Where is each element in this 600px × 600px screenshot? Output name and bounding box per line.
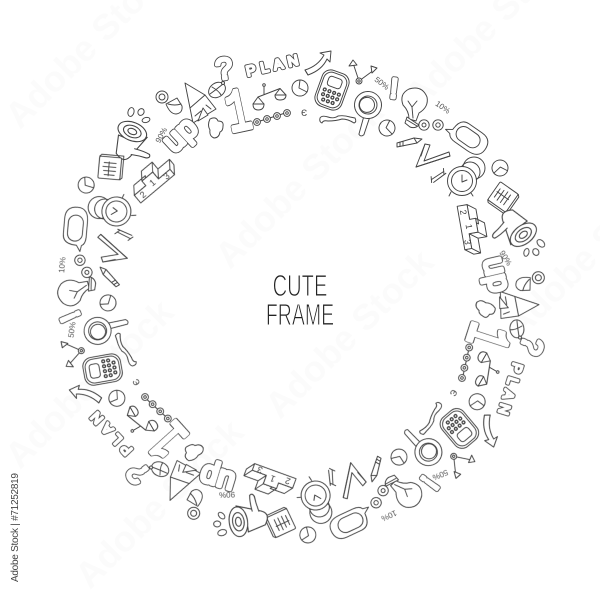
word: up: up — [155, 110, 204, 159]
icon: branching arrows — [54, 334, 89, 370]
icon: speech bubble — [443, 115, 492, 159]
title: CUTE FRAME: FRAME — [266, 299, 334, 332]
icon: pencil — [99, 263, 119, 289]
icon: alarm clock — [448, 157, 485, 196]
word: PLAN: PLAN — [245, 53, 300, 80]
faint stock watermarks: Adobe Stock — [0, 290, 182, 476]
icon: podium with numbers — [241, 461, 296, 501]
icon: podium with numbers: 3 — [462, 239, 473, 245]
icon: scales — [253, 84, 286, 110]
icon: small arrows — [431, 168, 447, 183]
icon: small arrows — [114, 225, 133, 244]
icon: branching arrows — [349, 60, 377, 84]
word: up: up — [155, 110, 204, 159]
label: 10%: 10% — [380, 508, 398, 523]
icon: calculator — [312, 67, 352, 113]
icon: pie chart — [297, 524, 319, 546]
icon: curved arrow — [473, 413, 507, 447]
icon: magnifier — [395, 423, 447, 471]
icon: speech bubble — [62, 206, 89, 252]
icon: pie chart — [466, 391, 488, 413]
icon: person with trophy — [514, 264, 547, 298]
icon: speech bubble — [327, 503, 376, 542]
faint stock watermarks: Adobe Stock — [67, 410, 252, 596]
title: CUTE FRAME: CUTE — [273, 268, 327, 303]
exclamation mark: ! — [388, 73, 399, 104]
label: 90%: 90% — [497, 249, 514, 267]
icon: rocket — [185, 83, 216, 123]
word: PLAN: PLAN — [88, 408, 136, 458]
label: 10%: 10% — [434, 99, 452, 116]
numeral 1: 1 — [138, 406, 204, 469]
label: 50%: 50% — [431, 468, 449, 482]
icon: podium with numbers: 2 — [138, 189, 148, 200]
exclamation mark: ! — [55, 307, 86, 327]
icon: alarm clock — [84, 184, 137, 236]
doodle ring, arc 1 of 3 — [115, 51, 520, 256]
exclamation mark: ! — [388, 73, 399, 104]
icon: person with trophy — [178, 487, 211, 521]
icon: check mark — [334, 463, 371, 504]
icon: podium with numbers: 2 — [284, 475, 292, 487]
exclamation mark: ! — [55, 307, 86, 327]
word: up: up — [196, 458, 239, 501]
icon: cloud — [472, 297, 497, 320]
word: PLAN: PLAN — [245, 53, 300, 80]
icon: squiggle — [320, 116, 356, 123]
icon: light bulb — [379, 470, 426, 512]
icon: megaphone — [217, 493, 271, 544]
icon: notes — [264, 507, 296, 538]
icon: cloud — [208, 118, 223, 138]
icon: coins — [419, 120, 443, 130]
doodle ring, arc 2 of 3 — [222, 158, 600, 600]
label: 90%: 90% — [154, 126, 169, 144]
icon: magnifier — [351, 90, 383, 138]
word: PLAN: PLAN — [494, 361, 525, 416]
icon: squiggle — [113, 332, 137, 367]
icon: person with trophy — [156, 91, 182, 114]
question mark: ? — [214, 52, 235, 87]
label: 50%: 50% — [66, 321, 78, 338]
icon: squiggle — [419, 401, 443, 436]
faint stock watermarks: Adobe Stock — [207, 90, 392, 276]
icon: notes — [487, 182, 520, 215]
small symbol: є — [301, 105, 307, 119]
icon: podium with numbers — [456, 202, 489, 256]
word: up: up — [476, 254, 518, 295]
icon: pie chart — [490, 158, 510, 178]
small symbol: є — [447, 387, 462, 399]
icon: pie chart — [377, 118, 397, 138]
doodle ring, arc 3 of 3 — [0, 124, 355, 577]
icon: megaphone — [115, 117, 150, 160]
icon: pie chart — [388, 446, 410, 468]
icon: curved arrow — [69, 378, 103, 412]
stock credit line: Adobe Stock | #71252819 — [10, 473, 21, 582]
numeral 1: 1 — [448, 314, 520, 357]
icon: rocket — [489, 285, 539, 331]
icon: podium with numbers: 1 — [269, 473, 277, 484]
question mark: ? — [513, 331, 549, 359]
icon: pie chart — [77, 176, 95, 194]
word: up: up — [196, 458, 239, 501]
icon: podium with numbers: 1 — [147, 177, 158, 188]
icon: pie chart — [99, 294, 117, 312]
label: 50%: 50% — [373, 75, 391, 92]
question mark: ? — [121, 456, 157, 490]
icon: magnifier — [80, 306, 132, 349]
icon: coins — [73, 253, 94, 279]
label: 90%: 90% — [219, 490, 235, 499]
icon: chain of dots — [254, 110, 290, 125]
icon: calculator — [81, 352, 124, 387]
icon: pencil — [365, 456, 385, 482]
icon: water drops — [521, 234, 547, 263]
numeral 1: 1 — [448, 314, 520, 357]
icon: check mark — [416, 144, 450, 167]
icon: cloud — [181, 440, 206, 463]
icon: light bulb — [53, 268, 100, 310]
small symbol: є — [128, 377, 143, 389]
question mark: ? — [121, 456, 157, 490]
icon: notes — [98, 154, 124, 180]
icon: podium with numbers: 3 — [256, 464, 264, 475]
icon: podium with numbers: 3 — [161, 171, 172, 182]
label: 10%: 10% — [57, 257, 68, 273]
exclamation mark: ! — [415, 471, 445, 495]
icon: megaphone — [490, 206, 544, 257]
word: PLAN: PLAN — [88, 408, 136, 458]
question mark: ? — [513, 331, 549, 359]
icon: water drops — [127, 107, 151, 123]
numeral 1: 1 — [220, 80, 258, 151]
icon: ball — [206, 79, 228, 101]
exclamation mark: ! — [415, 471, 445, 495]
icon: scales — [465, 350, 504, 392]
numeral 1: 1 — [220, 80, 258, 151]
icon: pencil — [397, 138, 422, 147]
icon: rocket — [155, 454, 205, 500]
title: CUTE FRAME — [266, 268, 334, 332]
icon: ball — [502, 314, 532, 344]
icon: check mark — [90, 229, 127, 270]
icon: pie chart — [106, 387, 128, 409]
icon: water drops — [208, 510, 234, 539]
numeral 1: 1 — [138, 406, 204, 469]
word: up: up — [476, 254, 518, 295]
icon: chain of dots — [140, 388, 172, 428]
icon: calculator — [436, 405, 482, 452]
icon: curved arrow — [305, 51, 331, 75]
icon: coins — [369, 484, 390, 510]
icon: branching arrows — [442, 446, 477, 482]
icon: ball — [145, 454, 175, 484]
icon: podium with numbers: 2 — [458, 209, 469, 216]
icon: small arrows — [323, 468, 341, 488]
question mark: ? — [214, 52, 235, 87]
word: PLAN: PLAN — [494, 361, 525, 416]
icon: light bulb — [402, 88, 427, 128]
icon: podium with numbers — [125, 152, 180, 204]
icon: scales — [120, 399, 159, 441]
icon: podium with numbers: 1 — [464, 223, 474, 230]
icon: alarm clock — [291, 475, 344, 527]
icon: chain of dots — [450, 343, 482, 383]
faint stock watermarks: Adobe Stock — [257, 240, 442, 426]
icon: pie chart — [292, 80, 308, 96]
